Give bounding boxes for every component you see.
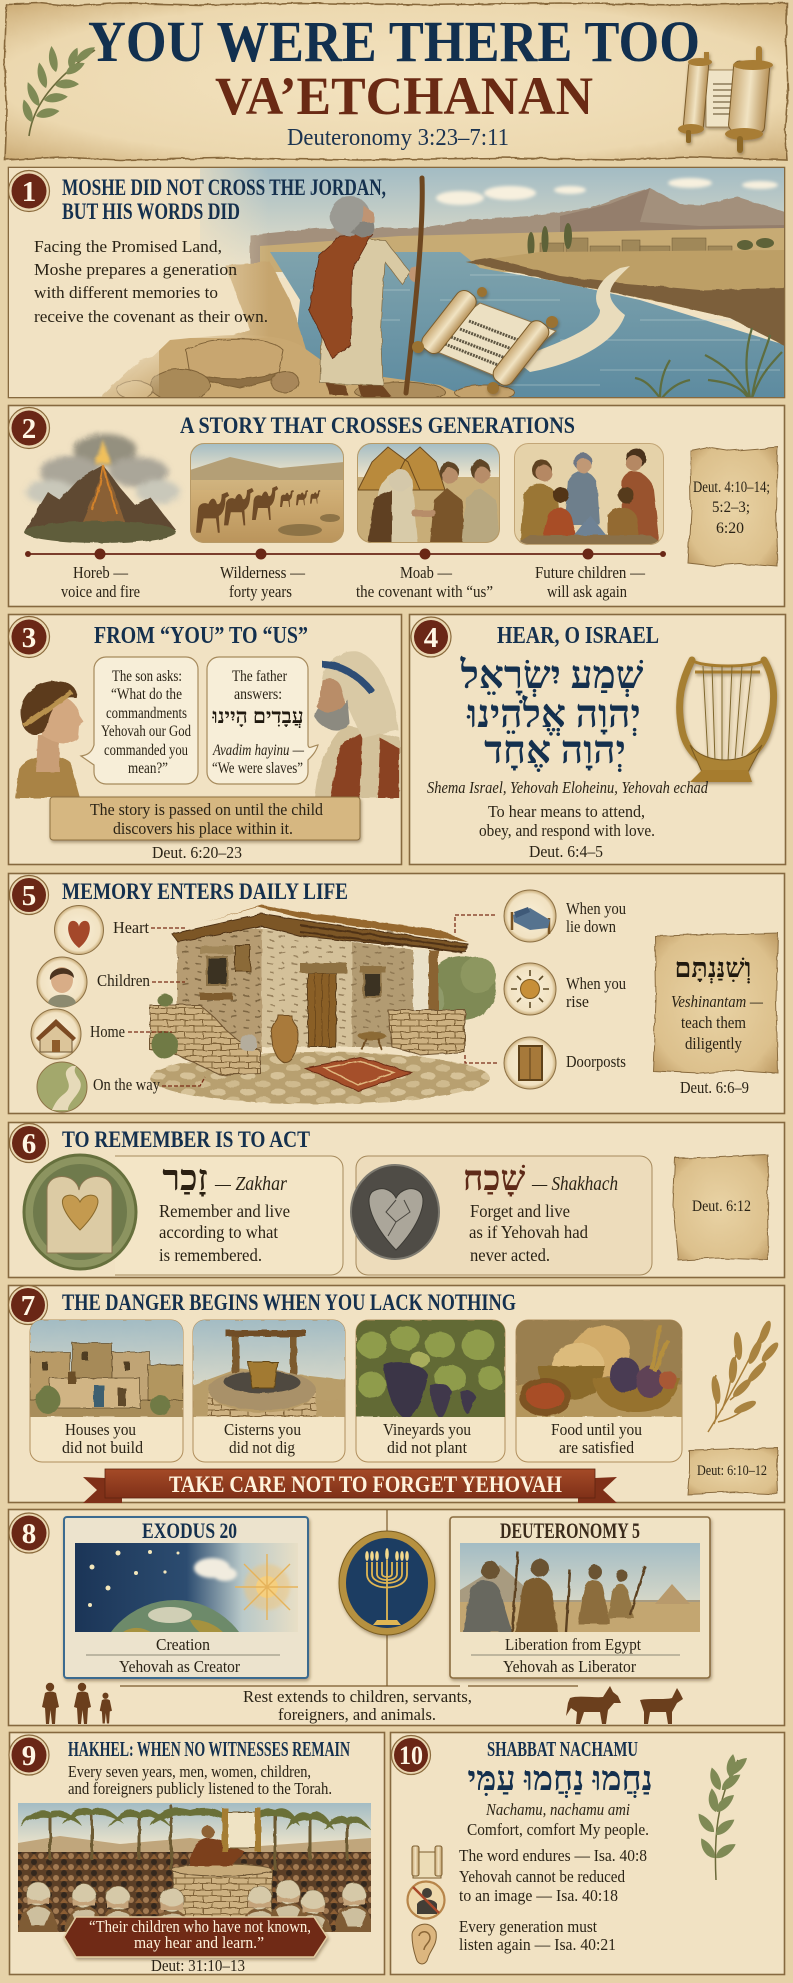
panel 1: Moshe did not cross the Jordan [8, 168, 785, 402]
body text 1 [34, 237, 268, 326]
house illustration [150, 905, 496, 1104]
labels right: rise [566, 992, 589, 1011]
badge 3 [8, 616, 50, 658]
labels right: Doorposts [566, 1052, 626, 1071]
circle icon: bed [504, 890, 556, 942]
icon: ear [412, 1924, 436, 1964]
card: shakhach [351, 1156, 652, 1275]
card: houses: did not build [62, 1438, 143, 1457]
rest text [243, 1687, 472, 1724]
timeline labels [61, 563, 646, 601]
rest text: foreigners, and animals. [278, 1705, 436, 1724]
badge 5: 5 [22, 880, 36, 912]
badge 6: 6 [22, 1128, 36, 1160]
image: Moab covenant [357, 443, 500, 543]
reference 3: Deut. 6:20–23 [152, 843, 242, 862]
image: future children asking [514, 443, 664, 545]
card: cisterns: did not dig [229, 1438, 295, 1457]
body text 9 [68, 1762, 332, 1798]
medallion: broken stone heart [351, 1165, 439, 1259]
heading 10: SHABBAT NACHAMU [487, 1737, 638, 1761]
quote banner: may hear and learn.” [134, 1933, 264, 1952]
reference note: Deut. 4:10-14 [688, 447, 778, 567]
badge 6 [10, 1124, 48, 1162]
card: zakhar: — Zakhar [214, 1173, 287, 1195]
image: liberation [460, 1543, 700, 1632]
icon: torah scroll [678, 46, 773, 153]
labels left: Children [97, 971, 150, 990]
Hebrew: zakhar: זָכַר [162, 1158, 208, 1198]
icon: animal silhouettes [566, 1686, 683, 1724]
timeline labels: the covenant with “us” [356, 582, 493, 601]
caption banner [50, 797, 360, 840]
heading 1: BUT HIS WORDS DID [62, 199, 240, 224]
badge 2: 2 [22, 413, 36, 445]
body text 9: and foreigners publicly listened to the Torah. [68, 1779, 332, 1798]
reference note: Deut. 4:10-14: 6:20 [716, 520, 744, 537]
medallion: menorah [339, 1531, 435, 1635]
badge 8 [9, 1513, 49, 1553]
circle icon: sun [504, 963, 556, 1015]
labels left: On the way [93, 1075, 160, 1094]
badge 5 [10, 876, 48, 914]
badge 3: 3 [22, 622, 36, 654]
labels right: When you [566, 899, 626, 918]
subtitle: VA'ETCHANAN: VA’ETCHANAN [215, 66, 593, 126]
card: shakhach: Forget and live [470, 1201, 570, 1221]
badge 2 [8, 408, 50, 448]
icon: olive branch [19, 44, 97, 136]
Hebrew: shema: שְׁמַע יִשְׂרָאֵל [460, 654, 644, 698]
list text [459, 1846, 647, 1954]
badge 9: 9 [22, 1740, 36, 1772]
speech bubble: son: commanded you [104, 742, 188, 759]
panel 10: shabbat nachamu [390, 1732, 784, 1974]
timeline [25, 548, 666, 560]
father portrait [314, 652, 400, 798]
heading 1 [62, 175, 386, 224]
reference note: Deut. 4:10-14: 5:2–3; [712, 499, 750, 516]
timeline labels: Future children — [535, 563, 646, 582]
badge 9 [9, 1735, 49, 1775]
speech bubble: father [207, 657, 318, 784]
card: zakhar: is remembered. [159, 1245, 262, 1265]
card: Exodus 20: EXODUS 20 [142, 1518, 237, 1543]
circle icon: heart [54, 906, 104, 954]
icon: lyre [680, 660, 774, 782]
heading 1: MOSHE DID NOT CROSS THE JORDAN, [62, 175, 386, 200]
icon: people silhouettes [42, 1683, 112, 1724]
body text 1: Facing the Promised Land, [34, 237, 222, 256]
badge 8: 8 [22, 1518, 36, 1550]
ribbon banner [83, 1469, 617, 1503]
timeline labels: Horeb — [73, 563, 129, 582]
Hebrew: shema [460, 654, 644, 773]
speech bubble: son: commandments [106, 705, 187, 722]
heading 6: TO REMEMBER IS TO ACT [62, 1127, 310, 1152]
quote banner: “Their children who have not known, [89, 1917, 311, 1936]
heading 2: A STORY THAT CROSSES GENERATIONS [180, 413, 575, 438]
card: shakhach: — Shakhach [531, 1173, 618, 1195]
panel 6: to remember is to act [8, 1122, 784, 1278]
panel 4: hear o israel [410, 614, 786, 864]
timeline labels: Wilderness — [220, 563, 306, 582]
Moshe figure [309, 196, 421, 397]
reference 4: Deut. 6:4–5 [529, 842, 603, 861]
timeline labels: Moab — [400, 563, 453, 582]
transliteration: Shema Israel, Yehovah Eloheinu, Yehovah echad [427, 778, 708, 797]
card: zakhar: according to what [159, 1222, 278, 1242]
reference note: Deut. 4:10-14: Deut. 4:10–14; [693, 479, 770, 496]
image: creation [75, 1543, 298, 1632]
card: vineyards [356, 1320, 505, 1462]
landscape illustration [9, 168, 785, 402]
labels left: Home [90, 1022, 125, 1041]
quote banner [64, 1917, 327, 1957]
image: Horeb mountain with fire [24, 434, 180, 543]
connector arrows [128, 915, 497, 1086]
note: veshinantam: diligently [685, 1034, 742, 1053]
speech bubble: father: Avadim hayinu — [212, 742, 305, 759]
card: zakhar: Remember and live [159, 1201, 290, 1221]
heading 4: HEAR, O ISRAEL [497, 623, 659, 649]
reference 5: Deut. 6:6–9 [680, 1078, 749, 1097]
card: cisterns: Cisterns you [224, 1420, 301, 1439]
labels left: Heart [113, 918, 149, 937]
header banner [4, 3, 788, 160]
heading 7: THE DANGER BEGINS WHEN YOU LACK NOTHING [62, 1290, 516, 1315]
desert plants [635, 328, 782, 398]
timeline labels: forty years [229, 582, 292, 601]
staff [406, 178, 422, 393]
panel 3: from you to us [8, 614, 402, 864]
list text: listen again — Isa. 40:21 [459, 1935, 616, 1954]
ribbon banner: TAKE CARE NOT TO FORGET YEHOVAH [169, 1472, 562, 1497]
circle icon: doorpost [504, 1037, 556, 1089]
card: cisterns [193, 1320, 345, 1462]
Hebrew: veshinantam: וְשִׁנַּנְתָּם [675, 953, 751, 983]
body text 4 [479, 802, 655, 840]
panel 9: hakhel [9, 1732, 384, 1975]
note: veshinantam: teach them [681, 1013, 746, 1032]
card: food: are satisfied [559, 1438, 634, 1457]
list text: The word endures — Isa. 40:8 [459, 1846, 647, 1865]
badge 10: 10 [399, 1741, 423, 1770]
speech bubble: father: The father [232, 668, 288, 685]
note: veshinantam: Veshinantam — [671, 992, 764, 1011]
speech bubble: son: mean?” [128, 760, 168, 777]
panel 2: a story that crosses generations [8, 406, 784, 606]
medallion: tablets and heart [24, 1155, 136, 1269]
labels right: When you [566, 974, 626, 993]
speech bubble: son: Yehovah our God [101, 723, 191, 740]
badge 1: 1 [22, 176, 36, 208]
icon: wheat [708, 1319, 781, 1432]
open scroll [412, 287, 558, 394]
badge 7: 7 [21, 1290, 35, 1322]
list text: to an image — Isa. 40:18 [459, 1886, 618, 1905]
icon: small scroll [412, 1846, 442, 1878]
card: Deuteronomy 5: DEUTERONOMY 5 [500, 1518, 640, 1543]
timeline labels: will ask again [547, 582, 627, 601]
card: shakhach: never acted. [470, 1245, 550, 1265]
card: Deuteronomy 5: Liberation from Egypt [505, 1635, 641, 1654]
card: Exodus 20: Yehovah as Creator [119, 1657, 240, 1676]
heading 9: HAKHEL: WHEN NO WITNESSES REMAIN [68, 1737, 350, 1761]
image: assembly [18, 1803, 374, 1942]
card: houses: Houses you [65, 1420, 136, 1439]
reference note 7: Deut: 6:10–12 [697, 1463, 767, 1479]
circle icon: the way [37, 1062, 87, 1112]
body text 9: Every seven years, men, women, children, [68, 1762, 311, 1781]
caption banner: The story is passed on until the child [90, 800, 323, 819]
circle icon: child [37, 957, 87, 1007]
card: Deuteronomy 5: Yehovah as Liberator [503, 1657, 636, 1676]
body text 1: receive the covenant as their own. [34, 307, 268, 326]
card: vineyards: Vineyards you [383, 1420, 471, 1439]
connector lines [120, 1510, 578, 1686]
card: shakhach: as if Yehovah had [469, 1222, 588, 1242]
list text: Every generation must [459, 1917, 597, 1936]
transliteration 10: Nachamu, nachamu ami [485, 1800, 630, 1819]
panel 5: memory enters daily life [8, 874, 784, 1114]
card: zakhar [24, 1155, 343, 1275]
panel 8: exodus and deuteronomy [8, 1508, 786, 1726]
badge 10 [392, 1736, 430, 1774]
reference note 6 [673, 1155, 768, 1260]
heading 5: MEMORY ENTERS DAILY LIFE [62, 879, 348, 904]
note: veshinantam [653, 933, 778, 1073]
rest text: Rest extends to children, servants, [243, 1687, 472, 1706]
heading 3: FROM “YOU” TO “US” [94, 623, 308, 649]
card: vineyards: did not plant [387, 1438, 467, 1457]
card: houses [30, 1320, 183, 1462]
speech bubble: son: “What do the [111, 686, 182, 703]
speech bubble: son [81, 657, 198, 784]
card: food: Food until you [551, 1420, 642, 1439]
speech bubble: father: “We were slaves” [212, 760, 303, 777]
badge 4: 4 [424, 622, 438, 654]
icon: olive sprig [695, 1754, 750, 1880]
card: Deuteronomy 5 [450, 1517, 710, 1678]
Hebrew: nachamu: נַחֲמוּ נַחֲמוּ עַמִּי [467, 1761, 653, 1798]
icon: no image [408, 1882, 444, 1918]
badge 7 [8, 1286, 48, 1324]
reference 9: Deut: 31:10–13 [151, 1956, 245, 1975]
labels right: lie down [566, 917, 616, 936]
card: food [516, 1317, 682, 1462]
reference note 6: Deut. 6:12 [692, 1198, 751, 1215]
reference: Deuteronomy: Deuteronomy 3:23–7:11 [287, 125, 509, 151]
body text 4: To hear means to attend, [488, 802, 645, 821]
body text 1: Moshe prepares a generation [34, 260, 238, 279]
Hebrew: shakhach: שָׁכַח [463, 1159, 526, 1198]
panel 7: the danger begins when you lack nothing [8, 1286, 784, 1503]
labels right [566, 899, 626, 1071]
speech bubble: son: The son asks: [112, 668, 182, 685]
list text: Yehovah cannot be reduced [459, 1867, 625, 1886]
boy portrait [15, 681, 84, 798]
body text 1: with different memories to [34, 283, 218, 302]
timeline labels: voice and fire [61, 582, 140, 601]
reference note 7 [687, 1448, 778, 1494]
title: YOU WERE THERE TOO: YOU WERE THERE TOO [88, 9, 700, 74]
Hebrew: shema: יְהוָה אֱלֹהֵינוּ [466, 693, 641, 737]
speech bubble: father: answers: [234, 686, 282, 703]
circle icon: home [31, 1009, 81, 1059]
card: Exodus 20 [62, 1516, 312, 1683]
badge 1 [8, 170, 50, 212]
Hebrew: shema: יְהוָה אֶחָד [484, 729, 626, 773]
labels left [90, 918, 160, 1094]
badge 4 [411, 617, 451, 657]
image: wilderness caravan [190, 443, 344, 543]
body text 4: obey, and respond with love. [479, 821, 655, 840]
translation 10: Comfort, comfort My people. [467, 1820, 649, 1839]
card: Exodus 20: Creation [156, 1635, 210, 1654]
Hebrew: avadim hayinu: עֲבָדִים הָיִינוּ [211, 704, 304, 728]
caption banner: discovers his place within it. [113, 819, 293, 838]
